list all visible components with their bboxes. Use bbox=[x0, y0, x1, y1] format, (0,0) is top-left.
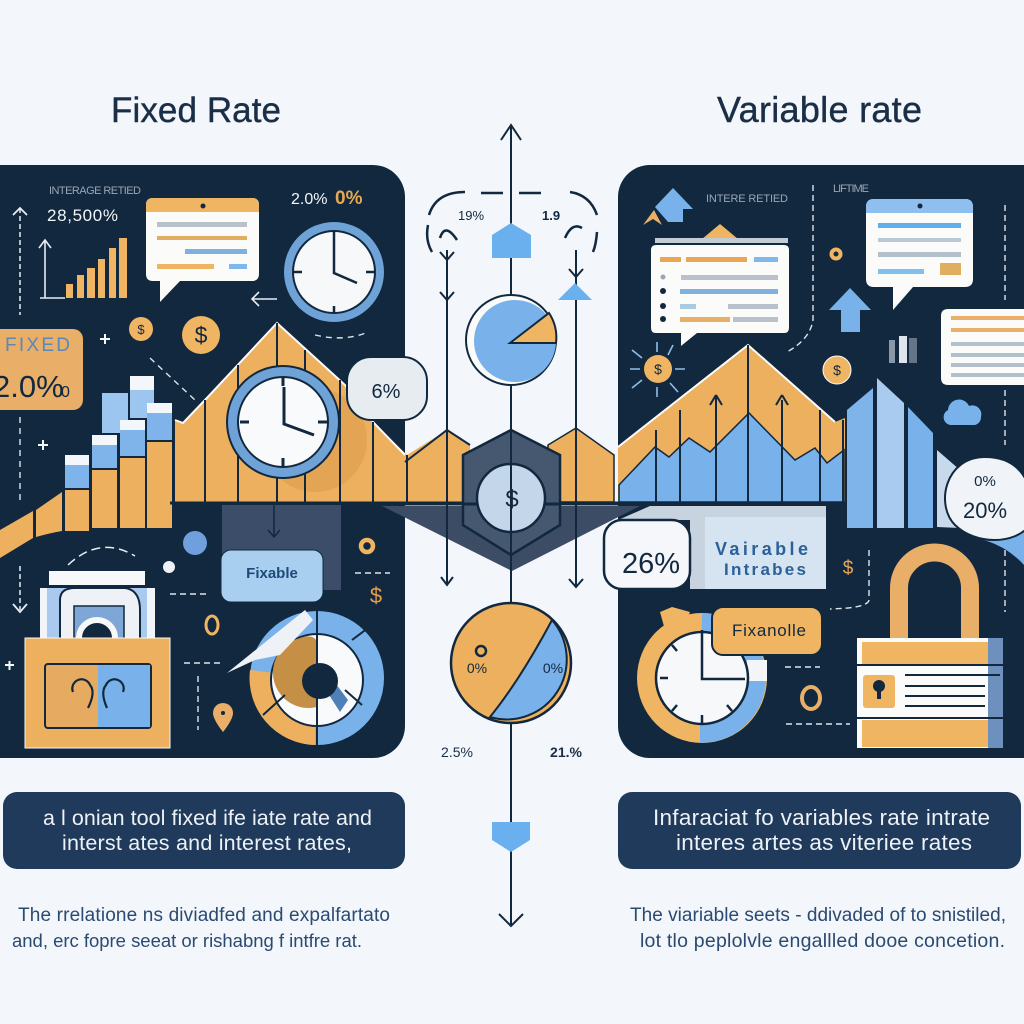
dashed arc bbox=[68, 547, 135, 565]
button: finable: Fixanolle bbox=[732, 621, 806, 640]
icon: ring coin bbox=[802, 687, 820, 709]
stacked blocks bbox=[65, 376, 172, 488]
panel label: INTERE RETIED bbox=[706, 193, 788, 205]
pie chart bottom bbox=[451, 603, 571, 723]
marker bottom bbox=[492, 822, 530, 852]
label: variable bbox=[705, 517, 826, 589]
central axis arrow bbox=[499, 125, 523, 926]
caption box: variable: interes artes as viteriee rates bbox=[676, 830, 972, 855]
dashed arcs bbox=[427, 192, 597, 252]
axis value right: 21.% bbox=[550, 744, 583, 760]
pie chart top bbox=[466, 295, 556, 385]
dashed guides bbox=[785, 185, 1005, 724]
dashed guides lower bbox=[170, 573, 390, 730]
button: fixable bbox=[221, 550, 323, 602]
icon: coin: $ bbox=[137, 322, 145, 337]
icon: clock bbox=[284, 222, 384, 322]
house marker bbox=[492, 223, 531, 258]
icon: lock folder bbox=[25, 571, 170, 748]
label: variable: Intrabes bbox=[724, 560, 806, 579]
callout: percent: 26% bbox=[622, 548, 680, 580]
badge: fixed: 0 bbox=[61, 384, 70, 401]
caption box: variable: Infaraciat fo variables rate intrate bbox=[653, 805, 990, 830]
dashed arrow bbox=[13, 208, 27, 315]
arrow to button bbox=[268, 505, 280, 537]
body text: variable bbox=[630, 905, 1006, 952]
clock in band bbox=[227, 366, 339, 478]
pie chart bottom: 0% bbox=[543, 660, 563, 676]
caption box: fixed: a l onian tool fixed ife iate rate and bbox=[43, 806, 372, 830]
label: variable: Vairable bbox=[715, 539, 808, 559]
percent label: 2.0% bbox=[291, 191, 327, 208]
band ridges bbox=[205, 323, 843, 502]
icon: blue coin bbox=[183, 531, 207, 555]
arrow bbox=[252, 292, 277, 306]
pie chart bottom: 0% bbox=[467, 660, 487, 676]
triangle marker bbox=[558, 283, 592, 300]
bubble: percent right: 0% bbox=[974, 473, 996, 490]
center hexagon: $ bbox=[505, 486, 519, 513]
icon: dollar coin: $ bbox=[195, 322, 208, 348]
stepped bars bbox=[65, 442, 172, 531]
arrow down bbox=[13, 566, 27, 612]
icon: padlock bbox=[857, 552, 1003, 748]
text: 1.9 bbox=[542, 208, 560, 223]
up arrow bbox=[829, 288, 871, 332]
icon: sun coin bbox=[630, 342, 685, 397]
title: Fixed Rate: Fixed Rate bbox=[111, 91, 281, 130]
panel label: INTERAGE RETIED bbox=[49, 185, 141, 197]
donut chart bbox=[227, 610, 384, 745]
side arrows bbox=[440, 250, 583, 587]
striped card bbox=[941, 309, 1024, 385]
icon: up arrow bbox=[643, 188, 693, 225]
icon: ring coin bbox=[206, 616, 218, 634]
dashed guide lines bbox=[20, 332, 368, 500]
panel: variable rate bbox=[618, 165, 1024, 758]
button: fixable: Fixable bbox=[246, 565, 298, 582]
icon: dollar coin bbox=[182, 316, 220, 354]
icon: coin bbox=[823, 356, 851, 384]
icon: coin bbox=[129, 317, 153, 341]
title: Variable rate: Variable rate bbox=[717, 89, 922, 130]
shaded block behind button bbox=[222, 505, 341, 590]
band line bbox=[170, 502, 845, 504]
panel label: LIFTIME bbox=[833, 183, 869, 195]
bubble: percent: 6% bbox=[372, 381, 401, 403]
icon: dollar sign: $ bbox=[370, 583, 382, 608]
caption box: fixed: interst ates and interest rates, bbox=[62, 831, 352, 855]
callout: percent bbox=[604, 520, 690, 589]
caption box: fixed bbox=[3, 792, 405, 869]
shaded label backdrop bbox=[618, 506, 826, 589]
icon: sun coin: $ bbox=[654, 361, 662, 377]
center hexagon bbox=[382, 430, 640, 571]
right blue area bbox=[619, 413, 844, 502]
badge: fixed bbox=[0, 329, 83, 410]
body text: fixed: and, erc fopre seeat or rishabng f intfre rat. bbox=[12, 930, 362, 951]
icon: white dot bbox=[163, 561, 175, 573]
sparkles bbox=[5, 334, 110, 670]
button: finable bbox=[712, 607, 822, 655]
speech card bbox=[146, 198, 259, 302]
right orange mountain bbox=[618, 345, 845, 502]
icon: small coin bbox=[361, 540, 373, 552]
axis value left: 2.5% bbox=[441, 744, 473, 760]
left strip bbox=[0, 492, 62, 558]
icon: map pin bbox=[213, 703, 233, 732]
left orange mountains bbox=[175, 323, 470, 502]
right arrows bbox=[710, 395, 788, 405]
body text: variable: lot tlo peplolvle engallled dooe concetion. bbox=[640, 930, 1005, 952]
icon: stopwatch bbox=[637, 607, 767, 743]
mountain band bbox=[0, 323, 1024, 565]
icon: dollar: $ bbox=[843, 558, 854, 579]
body text: variable: The viariable seets - ddivaded of to snistiled, bbox=[630, 905, 1006, 926]
bubble: percent bbox=[347, 357, 427, 420]
icon: small ring bbox=[832, 250, 840, 258]
body text: fixed: The rrelatione ns diviadfed and expalfartato bbox=[18, 905, 390, 926]
blue swoosh bbox=[975, 520, 1024, 565]
caption box: variable bbox=[618, 792, 1021, 869]
panel: fixed rate bbox=[0, 165, 405, 758]
mini bars bbox=[889, 336, 917, 363]
rate figure: 28,500% bbox=[47, 206, 118, 225]
table card bbox=[651, 224, 789, 346]
right blue towers bbox=[847, 378, 960, 528]
axis labels: 19% bbox=[458, 208, 484, 223]
badge: fixed: FIXED bbox=[5, 335, 70, 356]
bubble: percent right: 20% bbox=[963, 498, 1007, 523]
bar chart bbox=[39, 238, 127, 298]
icon: cloud bbox=[944, 400, 981, 425]
center right mountain bbox=[548, 428, 614, 502]
speech card bbox=[866, 199, 973, 310]
percent glyph: 0% bbox=[335, 188, 363, 209]
body text: fixed bbox=[12, 905, 390, 951]
icon: coin: $ bbox=[833, 362, 841, 378]
bubble: percent right bbox=[945, 457, 1024, 540]
